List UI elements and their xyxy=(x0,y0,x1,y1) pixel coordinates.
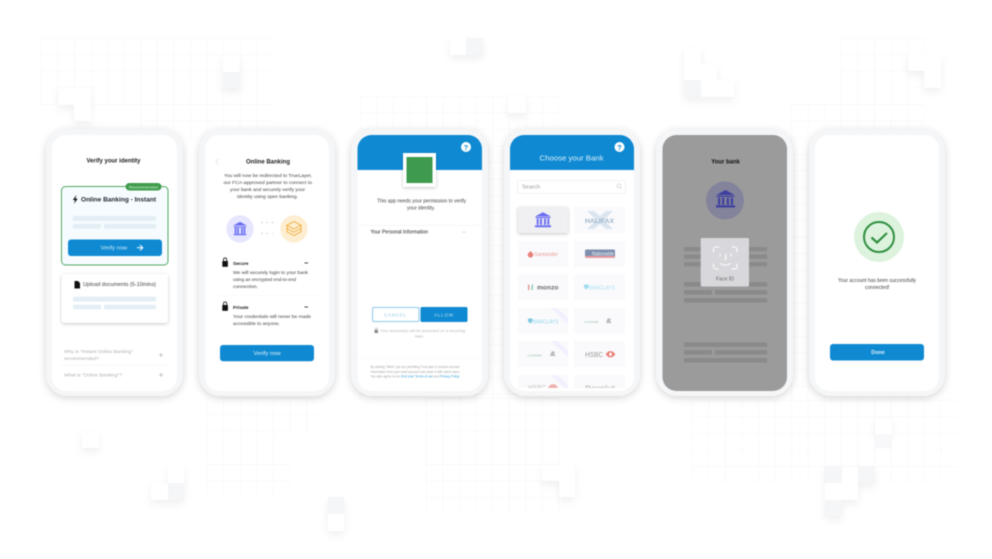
section: secure: Secure xyxy=(233,261,249,267)
icon: bolt xyxy=(73,195,78,204)
lloyds bank: LLOYDS BANK xyxy=(584,320,599,324)
faq list xyxy=(61,349,168,379)
icon: document xyxy=(74,281,80,288)
connection dots xyxy=(261,222,273,234)
monzo: monzo xyxy=(537,284,559,292)
intro paragraph: identity using open banking. xyxy=(237,194,298,200)
faq list: recommended? xyxy=(64,356,99,362)
intro paragraph: your bank and securely verify your xyxy=(230,187,305,193)
button: allow: ALLOW xyxy=(434,312,454,317)
lloyds bank xyxy=(584,318,612,324)
background grid xyxy=(41,38,957,514)
section: secure: We will securely login to your bank xyxy=(233,270,309,276)
card: online banking xyxy=(62,183,168,265)
nationwide xyxy=(585,250,615,258)
section: private xyxy=(222,302,311,327)
icon: success check xyxy=(854,212,904,262)
phone 4: choose your bank xyxy=(504,129,640,401)
lloyds bank business: LLOYDS BANK xyxy=(528,354,542,358)
personal information row: Your Personal Information xyxy=(370,230,428,236)
blue header xyxy=(358,135,482,170)
intro paragraph xyxy=(224,173,312,200)
revolut: Revolut xyxy=(585,384,616,392)
legal text: information from your bank account and share it with client name xyxy=(370,370,460,374)
intro paragraph: You will now be redirected to TrueLayer, xyxy=(224,173,312,179)
legal text xyxy=(370,365,460,378)
icon: help: ? xyxy=(464,143,469,152)
face id label: Face ID xyxy=(716,277,734,283)
title: Online Banking xyxy=(246,158,290,165)
blue header xyxy=(510,135,634,170)
button: cancel xyxy=(372,308,419,322)
face id dialog xyxy=(701,238,749,286)
permission text xyxy=(377,199,466,212)
upload label: Upload documents (5-10mins) xyxy=(83,282,156,288)
section: private: Private xyxy=(233,305,249,311)
personal information row xyxy=(370,230,466,236)
legal text: By clicking "Allow" you are permitting TrueLayer to access account xyxy=(370,365,460,369)
icon: help xyxy=(461,142,471,152)
icon: layers circle xyxy=(280,215,308,243)
icon: help xyxy=(614,142,624,152)
barclays business: BARCLAYS xyxy=(533,319,559,325)
search box xyxy=(518,180,626,194)
icon: bank circle xyxy=(226,215,254,243)
phone 6: success xyxy=(809,129,945,396)
success message xyxy=(838,278,916,291)
monzo xyxy=(528,284,559,292)
hsbc xyxy=(585,351,616,359)
legal text: You also agree to our End User Terms of use and Privacy Policy xyxy=(370,374,460,378)
green logo tile xyxy=(403,153,436,187)
nationwide: Nationwide xyxy=(592,252,614,258)
title: Your bank xyxy=(711,158,740,165)
button: verify now: Verify now xyxy=(254,351,281,357)
account access note xyxy=(374,328,465,338)
button: verify now: Verify now xyxy=(101,246,127,252)
card: upload documents xyxy=(62,274,168,323)
button: allow xyxy=(420,307,468,322)
button: done xyxy=(830,344,924,360)
permission text: This app needs your permission to verify xyxy=(377,199,466,205)
santander xyxy=(528,251,558,258)
button: done: Done xyxy=(871,350,885,356)
barclays: BARCLAYS xyxy=(589,285,615,291)
business ribbons xyxy=(553,308,568,388)
phone 3: permission xyxy=(351,129,488,396)
faq list: Why is "Instant Online Banking" xyxy=(64,349,133,355)
dimmed screen xyxy=(662,135,787,391)
phone 1: verify your identity xyxy=(46,129,183,396)
card heading: Online Banking - Instant xyxy=(81,196,157,203)
account access note: basis xyxy=(415,334,423,338)
faq list: What is "Online Banking"? xyxy=(64,373,122,379)
account access note: Your account(s) will be accessed on a recurring xyxy=(380,328,465,333)
section: secure: connection. xyxy=(233,284,258,290)
lloyds bank business xyxy=(528,351,556,358)
icon: bank circle xyxy=(706,182,744,220)
hsbc: HSBC xyxy=(585,352,603,359)
intro paragraph: our FCA-approved partner to connect to xyxy=(224,180,312,186)
section: secure xyxy=(222,258,309,290)
button: cancel: CANCEL xyxy=(384,312,406,317)
icon: face id xyxy=(714,247,737,269)
phone 2: online banking xyxy=(199,129,335,396)
placeholder lines xyxy=(73,216,156,228)
barclays business xyxy=(528,318,559,325)
permission text: your identity. xyxy=(407,206,435,212)
button: verify now xyxy=(220,345,314,361)
search box: Search xyxy=(522,185,540,191)
success message: connected! xyxy=(865,285,890,291)
barclays xyxy=(584,284,615,291)
back chevron xyxy=(216,158,218,164)
hsbc business: HSBC xyxy=(528,385,546,392)
placeholder lines xyxy=(684,247,767,362)
floating cubes xyxy=(58,38,941,531)
badge: recommended: Recommended xyxy=(129,185,158,189)
hsbc business xyxy=(528,384,558,388)
santander: Santander xyxy=(534,252,558,258)
success message: Your account has been successfully xyxy=(838,278,916,284)
section: secure: using an encrypted end-to-end xyxy=(233,277,296,283)
phone 5: face id xyxy=(656,129,793,396)
placeholder lines xyxy=(73,297,156,309)
section: private: accessible to anyone. xyxy=(233,321,280,327)
selected bank tile xyxy=(518,207,568,233)
halifax xyxy=(585,211,615,229)
bank grid xyxy=(516,206,616,388)
icon: help: ? xyxy=(617,143,622,152)
title: Verify your identity xyxy=(86,157,141,164)
section: private: Your credentials will never be made xyxy=(233,314,311,320)
header title: Choose your Bank xyxy=(540,154,604,163)
halifax: HALIFAX xyxy=(585,218,615,225)
